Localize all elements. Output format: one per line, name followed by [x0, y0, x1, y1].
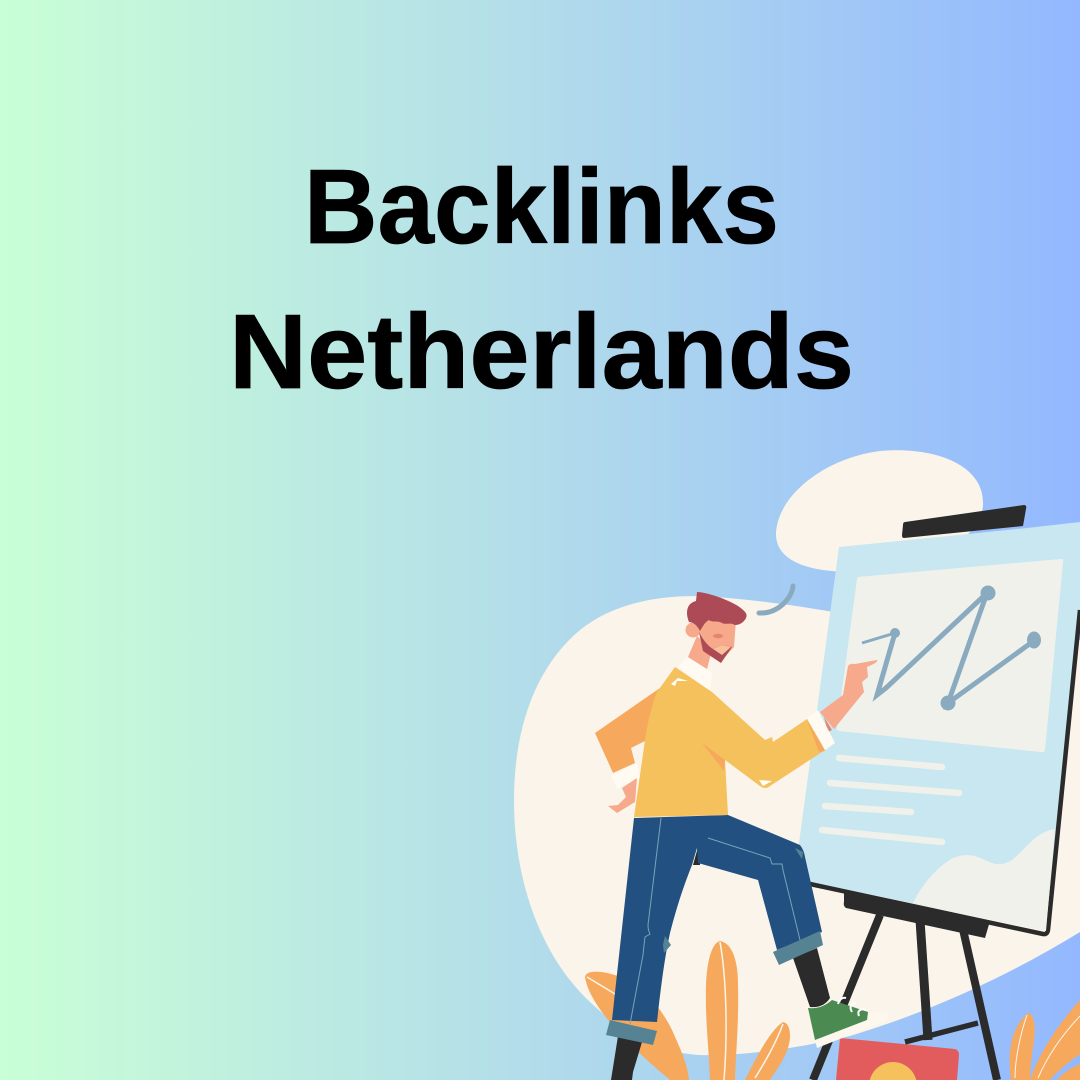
jeans cuffs — [606, 931, 823, 1045]
left hand — [608, 778, 637, 813]
blob: main cream — [514, 596, 1080, 1055]
line chart — [862, 586, 1041, 710]
hair — [687, 592, 747, 631]
beard — [699, 632, 732, 663]
title: Backlinks — [304, 148, 779, 266]
chart panel — [837, 559, 1063, 752]
neck — [688, 636, 712, 669]
sweater shading — [702, 720, 825, 771]
sweater highlights — [671, 678, 772, 786]
easel tray — [844, 890, 990, 938]
crotch shadow — [693, 840, 700, 865]
shoe — [808, 998, 888, 1048]
jeans tears — [663, 848, 803, 953]
head — [686, 592, 747, 663]
left cuff — [611, 763, 640, 789]
right cuff — [807, 710, 835, 750]
ear — [686, 622, 700, 638]
socks — [611, 948, 830, 1080]
collar — [678, 657, 712, 691]
left arm — [595, 688, 660, 773]
plant: right leaves — [1010, 1000, 1080, 1080]
forearm shadow — [824, 717, 832, 732]
sweater — [634, 667, 825, 817]
mouth — [713, 645, 731, 655]
red bag — [836, 1038, 959, 1080]
face — [698, 618, 736, 660]
easel top clip — [902, 505, 1026, 538]
poster hill — [913, 829, 1055, 931]
speech swoosh — [759, 586, 793, 613]
jeans — [612, 815, 822, 1022]
easel legs — [813, 915, 997, 1080]
forearm and pointing hand — [820, 660, 877, 729]
title — [229, 148, 854, 411]
poster board — [799, 522, 1080, 934]
cheek — [713, 634, 723, 638]
poster text lines — [822, 758, 959, 842]
blob: upper cream — [776, 450, 983, 572]
jeans seams — [630, 818, 800, 1024]
man — [595, 592, 888, 1080]
title: Netherlands — [229, 293, 854, 411]
plant: left leaves — [585, 941, 790, 1080]
